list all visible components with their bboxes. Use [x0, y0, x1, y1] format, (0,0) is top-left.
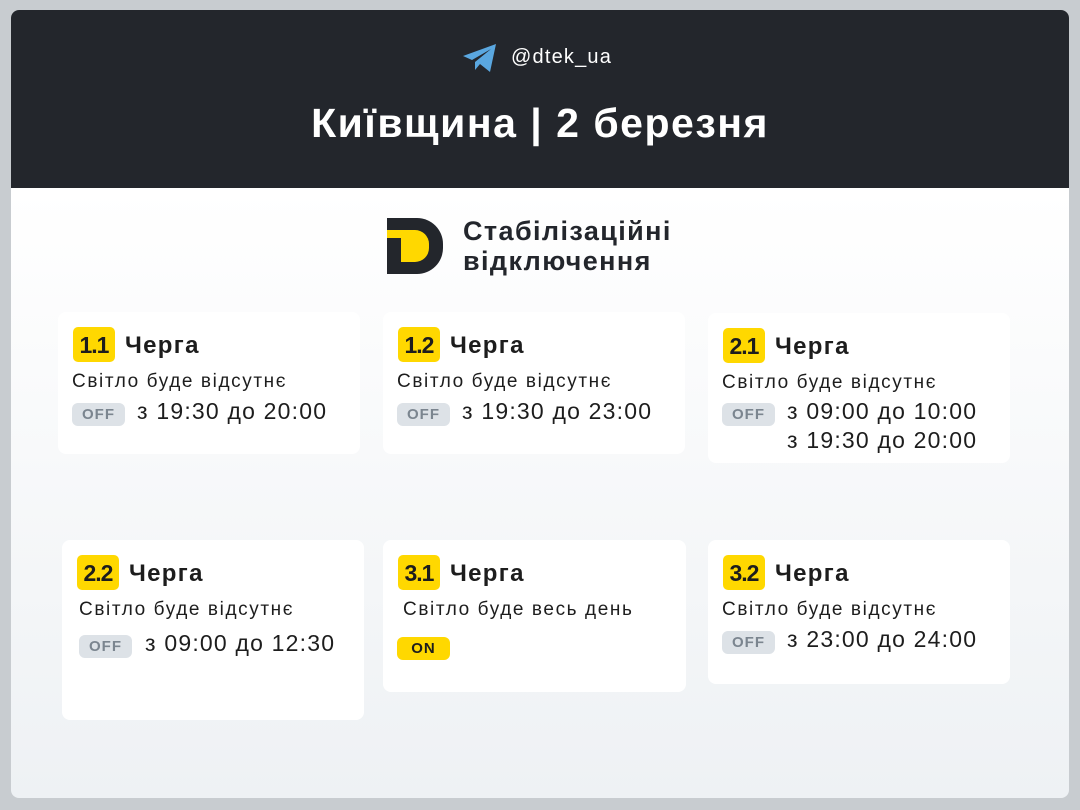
card 3.1: 3.1 — [404, 560, 433, 586]
card 3.1 — [383, 540, 686, 692]
card 2.2: Черга — [129, 560, 204, 587]
card 3.2: 3.2 — [730, 560, 758, 586]
logo block — [387, 216, 672, 276]
card 1.1: 1.1 — [80, 332, 108, 358]
handle: @dtek_ua — [511, 46, 612, 68]
card 1.1: OFF — [82, 406, 115, 423]
card 2.2: 2.2 — [84, 560, 112, 586]
card 3.2: Черга — [775, 560, 850, 587]
card 2.2: Світло буде відсутнє — [79, 599, 294, 620]
card 1.2: Черга — [450, 332, 525, 359]
card 3.1: ON — [411, 640, 436, 657]
title: Київщина | 2 березня — [311, 100, 769, 146]
card 3.2: з 23:00 до 24:00 — [787, 626, 977, 652]
card 1.2: Світло буде відсутнє — [397, 371, 612, 392]
card 3.2: OFF — [732, 634, 765, 651]
header — [11, 10, 1069, 188]
subtitle: відключення — [463, 246, 652, 276]
card 2.1 — [708, 313, 1010, 463]
icon: dtek logo — [387, 218, 443, 274]
card 2.1: Світло буде відсутнє — [722, 372, 937, 393]
card 1.1: Світло буде відсутнє — [72, 371, 287, 392]
card 2.1: з 19:30 до 20:00 — [787, 427, 977, 453]
card 2.1: з 09:00 до 10:00 — [787, 398, 977, 424]
card 3.1: Світло буде весь день — [403, 599, 634, 620]
card 3.1: Черга — [450, 560, 525, 587]
card 1.1: Черга — [125, 332, 200, 359]
subtitle — [463, 216, 672, 276]
card 2.2: OFF — [89, 638, 122, 655]
card 1.2: OFF — [407, 406, 440, 423]
card 1.2 — [383, 312, 685, 454]
card 2.2: з 09:00 до 12:30 — [145, 630, 335, 656]
icon: telegram — [463, 44, 496, 72]
subtitle: Стабілізаційні — [463, 216, 672, 246]
card 2.1: 2.1 — [730, 333, 758, 359]
card 2.1: OFF — [732, 406, 765, 423]
card 1.1 — [58, 312, 360, 454]
card 1.1: з 19:30 до 20:00 — [137, 398, 327, 424]
card 1.2: 1.2 — [404, 332, 433, 358]
card 2.1: Черга — [775, 333, 850, 360]
card 3.2: Світло буде відсутнє — [722, 599, 937, 620]
card 2.2 — [62, 540, 364, 720]
card 1.2: з 19:30 до 23:00 — [462, 398, 652, 424]
card 3.2 — [708, 540, 1010, 684]
